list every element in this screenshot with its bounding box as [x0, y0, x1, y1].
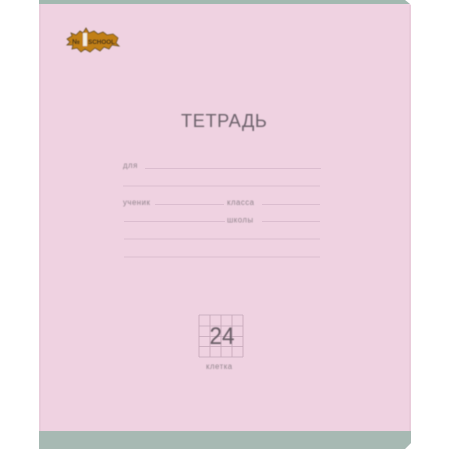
form labels: для — [123, 161, 138, 170]
title: ТЕТРАДЬ — [181, 111, 267, 131]
form labels: школы — [227, 216, 254, 224]
form labels: класса — [227, 198, 255, 207]
logo: No 1 School: № — [72, 38, 80, 46]
grid badge: 24: 24 — [210, 323, 234, 350]
form lines — [123, 168, 321, 257]
form labels — [123, 161, 255, 224]
top green strip — [39, 0, 410, 4]
logo: No 1 School — [67, 28, 119, 52]
label: клетка: клетка — [206, 362, 233, 371]
logo: No 1 School: SCHOOL — [88, 39, 115, 46]
bottom green strip — [39, 431, 411, 449]
form labels: ученик — [123, 198, 150, 207]
grid badge: 24 — [199, 315, 243, 357]
